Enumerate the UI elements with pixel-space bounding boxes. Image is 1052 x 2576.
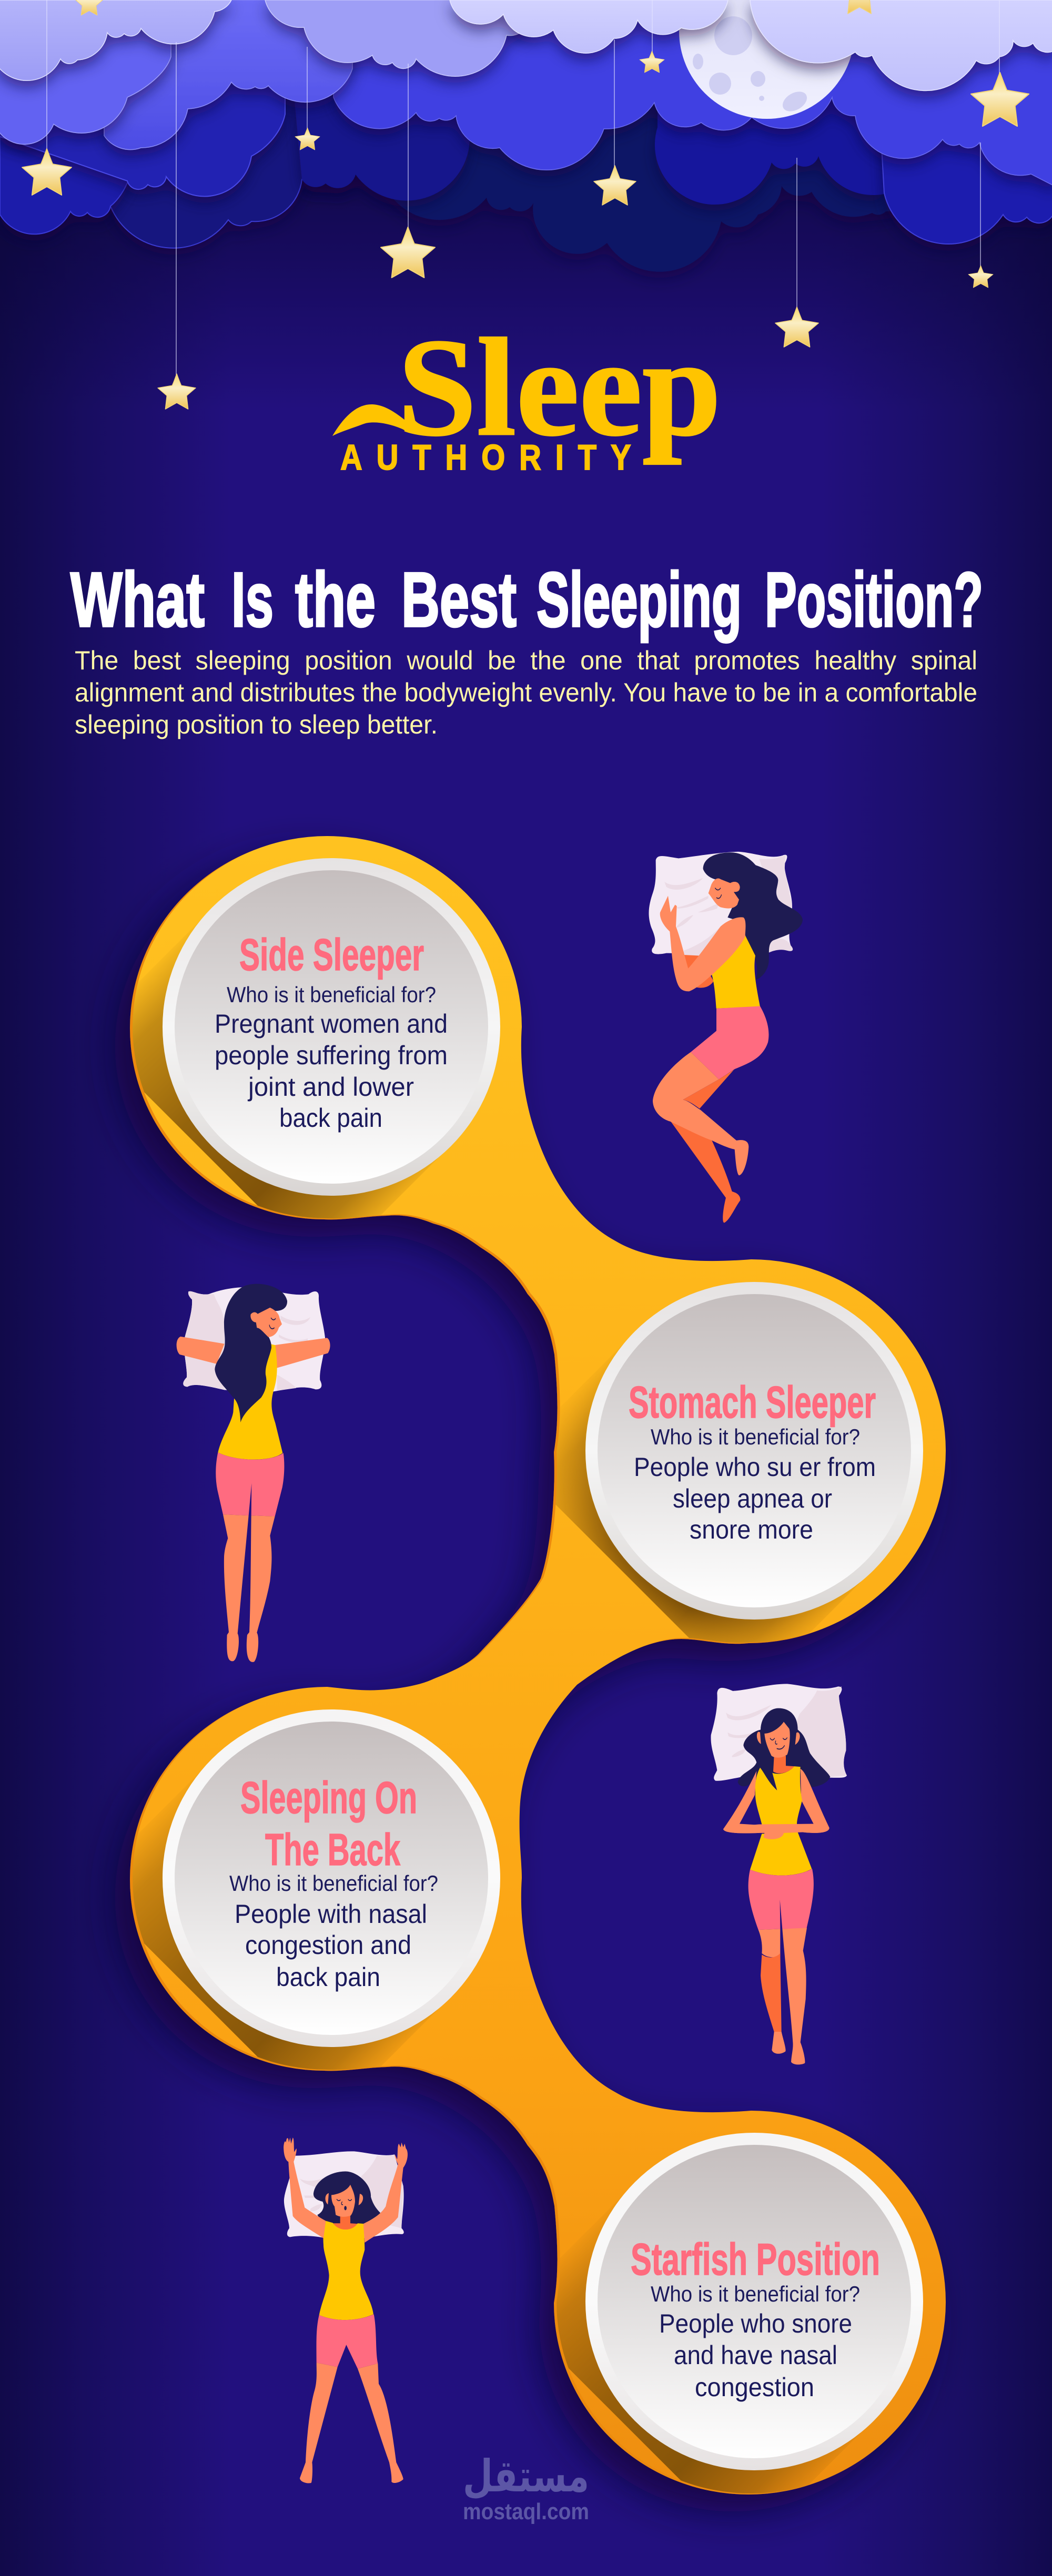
text: side sleeper benefits: people suffering from bbox=[215, 1041, 448, 1070]
text: stomach sleeper benefits: People who su er from bbox=[634, 1452, 876, 1482]
panel: stomach sleeper bbox=[585, 1282, 923, 1620]
cloud layer: deep right bbox=[873, 0, 1052, 244]
text: stomach sleeper benefits: Who is it beneficial for? bbox=[651, 1424, 860, 1449]
title: the bbox=[295, 557, 376, 643]
intro paragraph: sleeping position to sleep better. bbox=[75, 710, 438, 739]
cloud layer: darkest back bbox=[0, 0, 1052, 272]
text: side sleeper benefits bbox=[215, 982, 448, 1133]
heading: starfish position: Starfish Position bbox=[631, 2235, 880, 2285]
title: What bbox=[70, 557, 205, 643]
watermark bbox=[463, 2450, 589, 2524]
cloud layer: deep left scallop bbox=[105, 0, 337, 248]
moon bbox=[679, 0, 855, 119]
heading: side sleeper: Side Sleeper bbox=[239, 930, 424, 980]
cloud layer: bright periwinkle back bbox=[104, 0, 352, 150]
cloud layer: pale right bbox=[750, 0, 1052, 90]
text: side sleeper benefits: Who is it beneficial for? bbox=[227, 982, 436, 1007]
text: side sleeper benefits: Pregnant women and bbox=[215, 1009, 448, 1038]
text: starfish benefits: People who snore bbox=[659, 2309, 852, 2338]
cloud layer: pale centre bbox=[450, 0, 728, 53]
figure: woman sleeping in starfish position bbox=[284, 2137, 408, 2483]
text: starfish benefits: and have nasal bbox=[674, 2340, 837, 2370]
heading: sleeping on the back: Sleeping On bbox=[240, 1773, 417, 1823]
panel: starfish position bbox=[585, 2133, 923, 2470]
text: back sleeper benefits: back pain bbox=[276, 1962, 380, 1992]
hanging strings bbox=[47, 0, 999, 375]
connector edge and cast shadow bbox=[130, 837, 943, 2494]
text: starfish benefits: congestion bbox=[695, 2373, 814, 2402]
cloud layer: deep right centre bbox=[655, 0, 889, 205]
title: Best bbox=[401, 557, 517, 643]
connector body bbox=[133, 836, 946, 2493]
panel: side sleeper bbox=[163, 858, 500, 1196]
circle shadows bbox=[86, 908, 873, 2547]
figure: woman sleeping on her side bbox=[649, 852, 803, 1223]
cloud layer: lilac top left bbox=[0, 0, 231, 80]
text: stomach sleeper benefits: sleep apnea or bbox=[673, 1484, 832, 1513]
heading: stomach sleeper: Stomach Sleeper bbox=[629, 1378, 876, 1428]
figure: woman sleeping on her back bbox=[711, 1684, 847, 2064]
text: back sleeper benefits: Who is it beneficial for? bbox=[229, 1871, 438, 1896]
heading: sleeping on the back bbox=[240, 1773, 417, 1875]
text: stomach sleeper benefits bbox=[634, 1424, 876, 1544]
figure: woman sleeping on her stomach bbox=[177, 1284, 330, 1662]
cloud layer: left bump bbox=[0, 0, 129, 234]
hanging stars bbox=[22, 0, 1029, 409]
title: Is bbox=[231, 557, 274, 643]
cloud layer: bright periwinkle front bbox=[0, 0, 171, 144]
heading: sleeping on the back: The Back bbox=[265, 1825, 400, 1875]
text: back sleeper benefits: People with nasal bbox=[235, 1899, 427, 1929]
cloud layer: mid blue left bbox=[0, 0, 285, 196]
panel: sleeping on the back bbox=[163, 1709, 500, 2047]
intro paragraph bbox=[75, 646, 977, 739]
winding yellow connector with circles bbox=[86, 836, 946, 2547]
text: starfish benefits: Who is it beneficial for? bbox=[651, 2282, 860, 2306]
text: back sleeper benefits: congestion and bbox=[245, 1930, 411, 1960]
logo: Sleep Authority: AUTHORITY bbox=[340, 438, 631, 477]
clouds bbox=[0, 0, 1052, 272]
watermark: mostaql.com bbox=[463, 2499, 589, 2524]
title bbox=[70, 557, 983, 643]
text: side sleeper benefits: back pain bbox=[279, 1103, 382, 1133]
cloud layer: medium blue bbox=[333, 0, 1052, 186]
title: Sleeping bbox=[537, 557, 742, 643]
cloud layer: deep centre bbox=[285, 0, 470, 201]
watermark: مستقل bbox=[463, 2450, 589, 2502]
text: stomach sleeper benefits: snore more bbox=[690, 1515, 813, 1544]
intro paragraph: The best sleeping position would be the one that promotes healthy spinal bbox=[75, 646, 977, 675]
text: side sleeper benefits: joint and lower bbox=[247, 1072, 414, 1102]
text: back sleeper benefits bbox=[229, 1871, 438, 1992]
intro paragraph: alignment and distributes the bodyweight evenly. You have to be in a comfortable bbox=[75, 678, 977, 707]
logo: Sleep Authority: Sleep bbox=[398, 310, 721, 465]
text: starfish benefits bbox=[651, 2282, 860, 2402]
cloud layer: lilac centre bbox=[265, 0, 530, 76]
